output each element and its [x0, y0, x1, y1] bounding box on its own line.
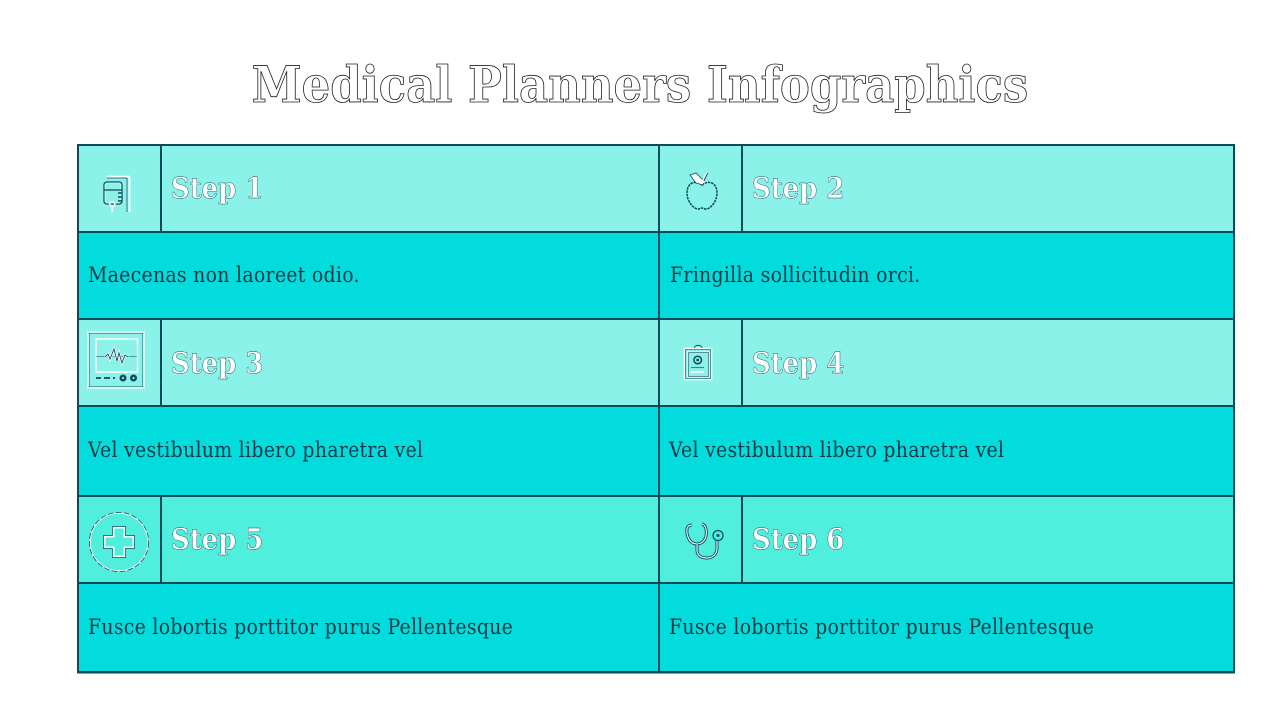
heading: step 3: Step 3: [171, 346, 263, 380]
panel: step 4 header: [659, 319, 1235, 407]
icon: heart monitor: [87, 331, 145, 389]
heading: step 2: Step 2: [752, 171, 844, 205]
text: step 1 description: Maecenas non laoreet odio.: [88, 263, 360, 287]
text: step 6 description: Fusce lobortis porttitor purus Pellentesque: [669, 615, 1094, 639]
text: step 4 description: Vel vestibulum libero pharetra vel: [669, 438, 1004, 462]
heading: step 5: Step 5: [171, 522, 263, 556]
icon: medical cross: [89, 512, 149, 572]
panel: step 6 header: [659, 496, 1235, 584]
heading: step 4: Step 4: [752, 346, 844, 380]
panel: step 3 header: [77, 319, 659, 407]
icon: apple: [686, 172, 718, 210]
icon: IV drip bag: [103, 176, 130, 212]
panel: step 2 header: [659, 144, 1235, 232]
text: step 2 description: Fringilla sollicitudin orci.: [670, 263, 921, 287]
title: Medical Planners Infographics: [252, 55, 1028, 114]
icon: stethoscope: [685, 522, 724, 560]
heading: step 6: Step 6: [752, 522, 844, 556]
table of steps: [77, 144, 1235, 674]
icon: clipboard: [684, 344, 712, 380]
panel: step 1 header: [77, 144, 659, 232]
text: step 5 description: Fusce lobortis porttitor purus Pellentesque: [88, 615, 513, 639]
text: step 3 description: Vel vestibulum libero pharetra vel: [88, 438, 423, 462]
heading: step 1: Step 1: [171, 171, 263, 205]
panel: step 5 header: [77, 496, 659, 584]
